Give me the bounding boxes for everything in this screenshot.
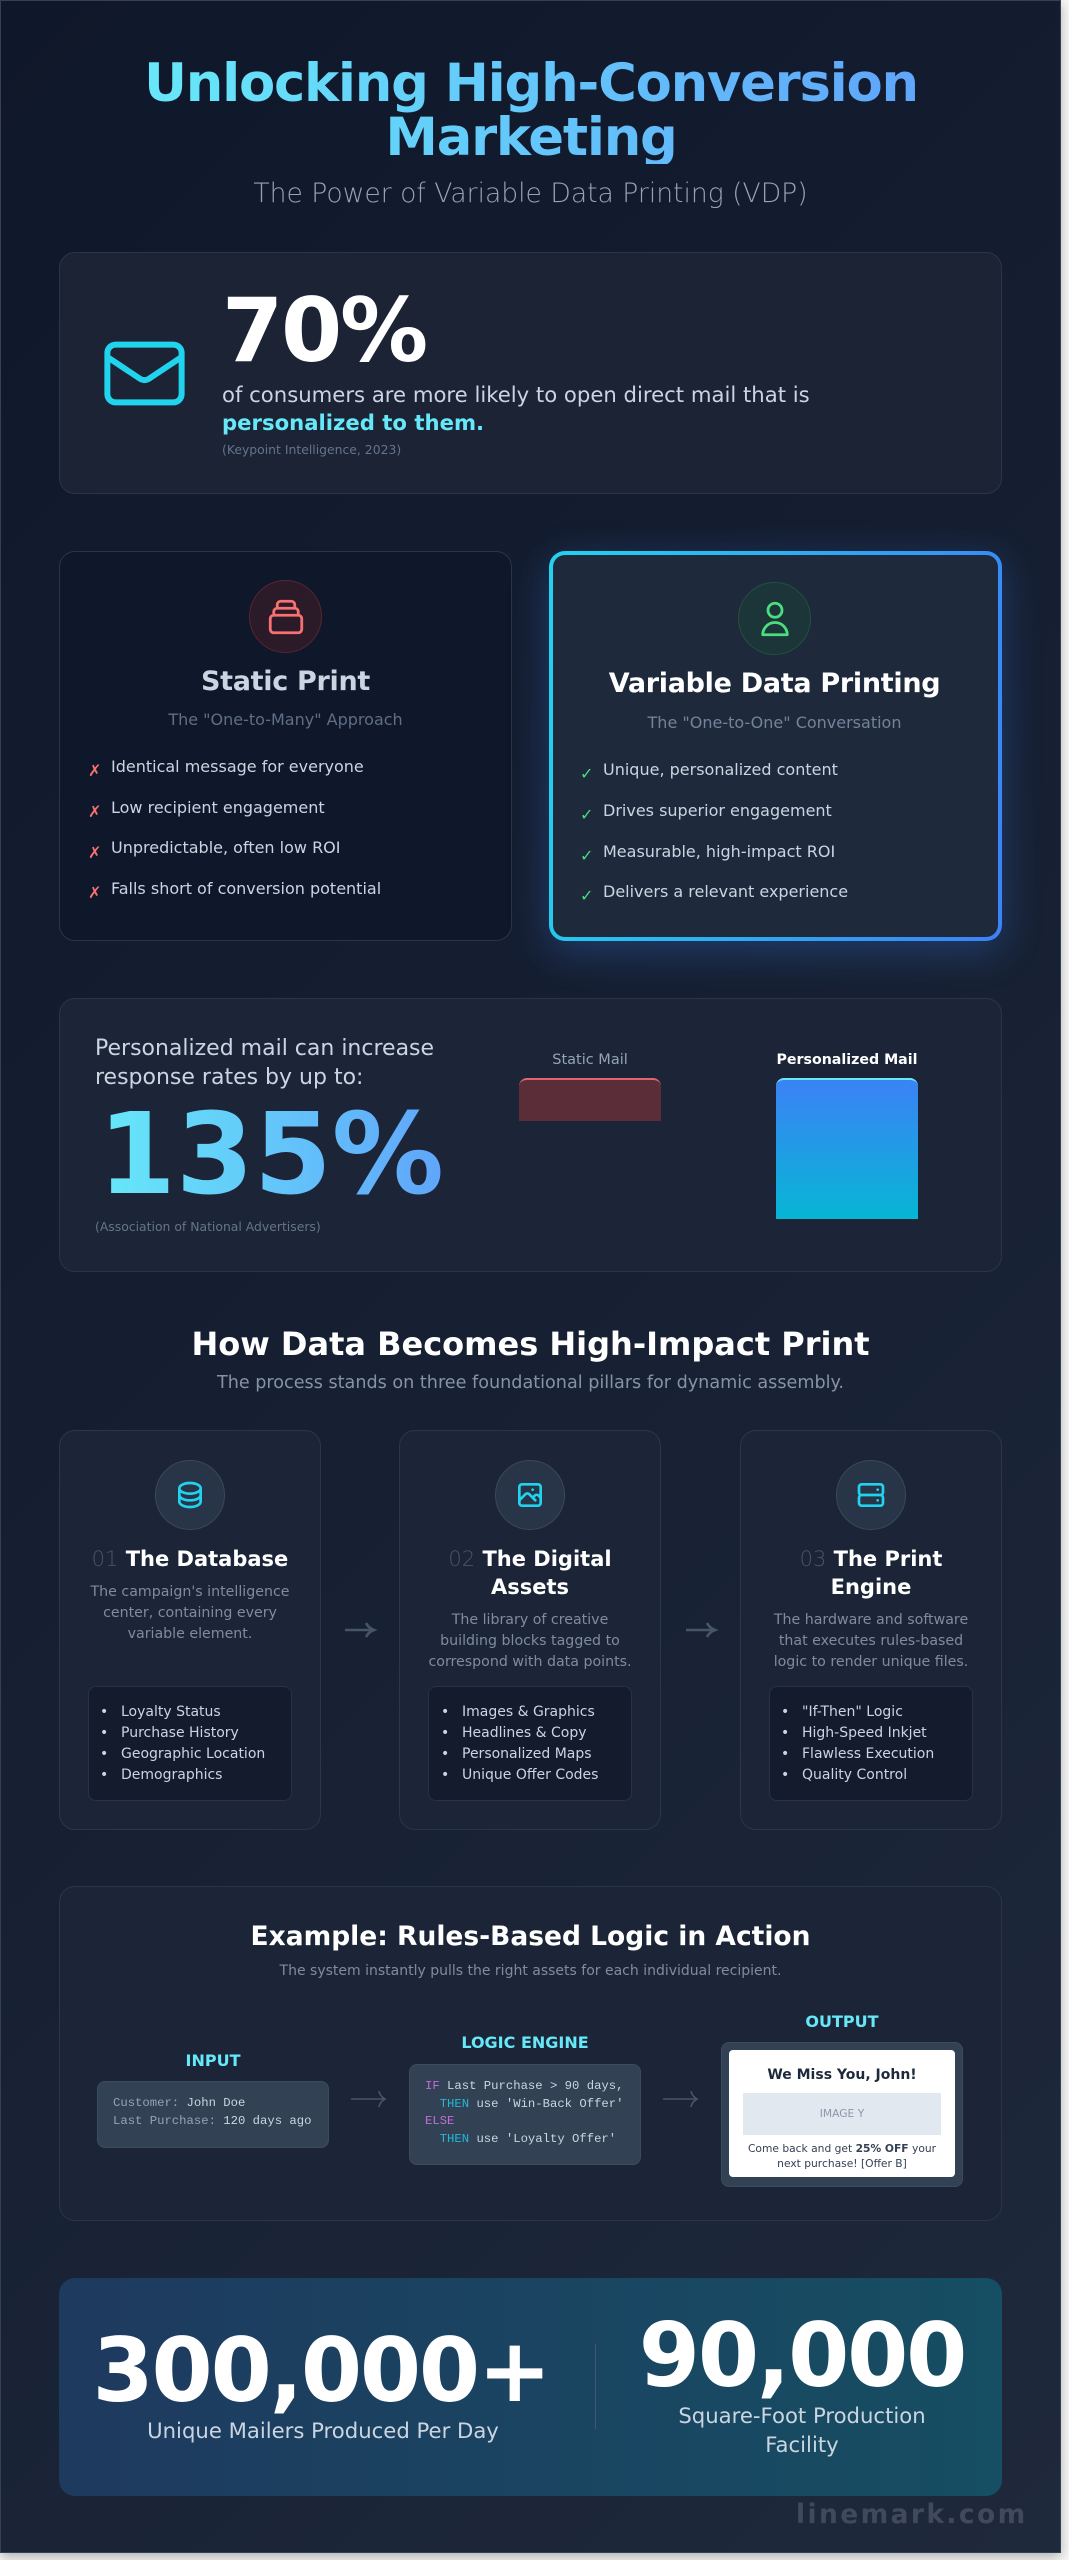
static list: Low recipient engagement: [111, 798, 325, 817]
panel: response rate: [59, 998, 1002, 1272]
list items: engine: •: [781, 1746, 789, 1762]
stat description: of consumers are more likely to open direct mail that is: [222, 382, 810, 407]
mailer headline: We Miss You, John!: [767, 2067, 917, 2083]
label: output: OUTPUT: [805, 2012, 879, 2031]
mailer offer text: Come back and get 25% OFF your: [748, 2142, 936, 2155]
input box: [97, 2081, 329, 2148]
watermark: linemark.com: [796, 2499, 1028, 2530]
list: engine features: [769, 1686, 973, 1801]
divider: [595, 2344, 596, 2429]
source note: (Keypoint Intelligence, 2023): [222, 442, 401, 457]
panel: static print: [59, 551, 512, 941]
icon: static print stack: [249, 580, 322, 653]
panel: pillar 1 database: [59, 1430, 321, 1830]
process subheading: The process stands on three foundational pillars for dynamic assembly.: [217, 1373, 844, 1393]
list items: assets: •: [441, 1767, 449, 1783]
source note: (Association of National Advertisers): [95, 1219, 321, 1234]
mailer image placeholder: IMAGE Y: [820, 2107, 864, 2120]
title: Unlocking High-Conversion: [144, 53, 918, 114]
arrow: input to logic: [351, 2091, 386, 2107]
static list: ✗: [88, 843, 101, 862]
list: database fields: [88, 1686, 292, 1801]
heading: the digital assets: [448, 1547, 612, 1599]
description: print engine: [774, 1612, 968, 1670]
list items: database: Loyalty Status: [121, 1704, 221, 1720]
stat description: personalized to them.: [222, 410, 484, 435]
list items: assets: Images & Graphics: [462, 1704, 595, 1720]
variable list: Measurable, high-impact ROI: [603, 842, 835, 861]
mailer image placeholder: [743, 2093, 941, 2135]
list items: database: [100, 1704, 265, 1783]
label: square-foot facility: Facility: [765, 2432, 839, 2456]
input box: Customer: John Doe Last Purchase: 120 days ago: [113, 2096, 312, 2128]
mailer offer text: [748, 2142, 936, 2170]
output mailer: [721, 2042, 963, 2187]
label: static mail: Static Mail: [552, 1052, 628, 1068]
variable list: ✓: [580, 846, 593, 865]
big number 70%: 70%: [222, 278, 426, 382]
label: unique mailers: Unique Mailers Produced Per Day: [147, 2418, 499, 2443]
list items: assets: •: [441, 1724, 449, 1740]
list items: database: Purchase History: [121, 1724, 239, 1740]
icon: image: [495, 1460, 565, 1530]
static list: ✗: [88, 883, 101, 902]
variable subheading: The "One-to-One" Conversation: [648, 712, 901, 732]
label: square-foot facility: Square-Foot Production: [678, 2403, 926, 2428]
stat description: [222, 382, 810, 435]
list items: engine: "If-Then" Logic: [802, 1704, 903, 1720]
panel: rules-based logic example: [59, 1886, 1002, 2221]
arrow: logic to output: [663, 2091, 698, 2107]
panel: pillar 3 print engine: [740, 1430, 1002, 1830]
label: logic engine: LOGIC ENGINE: [461, 2033, 589, 2052]
static subheading: The "One-to-Many" Approach: [168, 710, 403, 729]
arrow: pillar 2 to 3: [686, 1622, 718, 1638]
heading: the digital assets: Assets: [491, 1575, 569, 1599]
icon: envelope: [104, 342, 185, 406]
list items: engine: •: [781, 1704, 789, 1720]
subtitle: The Power of Variable Data Printing (VDP): [253, 178, 808, 209]
description: the database: [90, 1584, 289, 1642]
bar: static mail: [519, 1078, 661, 1121]
list items: assets: Headlines & Copy: [462, 1724, 586, 1740]
static list: Unpredictable, often low ROI: [111, 838, 340, 857]
list items: assets: [441, 1704, 598, 1783]
list items: database: Demographics: [121, 1767, 222, 1783]
icon: database: [154, 1460, 224, 1530]
description: digital assets: [428, 1612, 632, 1670]
stat: 300,000+: 300,000+: [93, 2318, 549, 2422]
list items: engine: High-Speed Inkjet: [802, 1724, 927, 1740]
response text: response rates by up to:: [95, 1065, 363, 1090]
variable list: Drives superior engagement: [603, 801, 832, 820]
list items: assets: Personalized Maps: [462, 1746, 592, 1762]
description: the database: variable element.: [128, 1626, 252, 1642]
label: square-foot facility: [678, 2403, 926, 2456]
stat: 90,000: 90,000: [639, 2304, 965, 2406]
static list: Falls short of conversion potential: [111, 879, 381, 898]
static list: [88, 757, 381, 902]
label: personalized mail: Personalized Mail: [776, 1052, 918, 1068]
heading: the print engine: [800, 1547, 942, 1599]
description: print engine: The hardware and software: [774, 1612, 968, 1628]
label: input: INPUT: [186, 2051, 240, 2070]
mailer card: [729, 2050, 955, 2177]
mailer offer text: next purchase! [Offer B]: [777, 2156, 907, 2170]
heading: variable data printing: Variable Data Printing: [609, 668, 940, 699]
panel: 70% stat: [59, 252, 1002, 494]
heading: the database: 01 The Database: [92, 1547, 288, 1571]
description: the database: center, containing every: [103, 1605, 277, 1621]
heading: the print engine: Engine: [831, 1575, 911, 1599]
heading: the print engine: 03 The Print: [800, 1547, 942, 1571]
variable list: [580, 760, 848, 905]
heading: static print: Static Print: [201, 666, 370, 697]
list items: database: •: [100, 1704, 108, 1720]
list items: engine: Flawless Execution: [802, 1746, 934, 1762]
logic box: [409, 2064, 641, 2165]
logic box: IF Last Purchase > 90 days, THEN use 'Win-Back Offer' ELSE THEN use 'Loyalty Offer': [425, 2079, 624, 2146]
list items: assets: •: [441, 1704, 449, 1720]
response text: [95, 1036, 434, 1090]
list items: assets: •: [441, 1746, 449, 1762]
variable list: ✓: [580, 764, 593, 783]
title: Marketing: [385, 106, 677, 168]
title: [143, 57, 919, 164]
list items: database: •: [100, 1767, 108, 1783]
variable list: ✓: [580, 886, 593, 905]
list items: engine: Quality Control: [802, 1767, 907, 1783]
panel: variable data printing: [549, 551, 1002, 941]
icon: person: [738, 582, 811, 655]
bar chart: [519, 1052, 918, 1219]
panel: production stats: [59, 2278, 1002, 2496]
description: print engine: that executes rules-based: [779, 1633, 963, 1649]
list items: engine: •: [781, 1724, 789, 1740]
static list: ✗: [88, 761, 101, 780]
bar: personalized mail: [776, 1078, 918, 1219]
big number 135%: 135%: [98, 1090, 444, 1220]
list: asset types: [428, 1686, 632, 1801]
heading: the digital assets: 02 The Digital: [448, 1547, 612, 1571]
list items: engine: [781, 1704, 934, 1783]
description: print engine: logic to render unique files.: [774, 1654, 968, 1670]
description: the database: The campaign's intelligence: [91, 1584, 289, 1600]
variable list: ✓: [580, 805, 593, 824]
icon: server: [836, 1460, 906, 1530]
description: digital assets: The library of creative: [452, 1612, 608, 1628]
response text: Personalized mail can increase: [95, 1036, 434, 1061]
static list: ✗: [88, 802, 101, 821]
list items: engine: •: [781, 1767, 789, 1783]
example subheading: The system instantly pulls the right assets for each individual recipient.: [280, 1963, 781, 1979]
arrow: pillar 1 to 2: [345, 1622, 378, 1638]
description: digital assets: building blocks tagged to: [440, 1633, 620, 1649]
variable list: Unique, personalized content: [603, 760, 838, 779]
list items: database: •: [100, 1746, 108, 1762]
list items: assets: Unique Offer Codes: [462, 1767, 598, 1783]
list items: database: •: [100, 1724, 108, 1740]
list items: database: Geographic Location: [121, 1746, 265, 1762]
panel: pillar 2 digital assets: [399, 1430, 661, 1830]
description: digital assets: correspond with data points.: [428, 1654, 632, 1670]
heading: how data becomes print: How Data Becomes High-Impact Print: [191, 1325, 870, 1363]
static list: Identical message for everyone: [111, 757, 364, 776]
variable list: Delivers a relevant experience: [603, 882, 848, 901]
example heading: Example: Rules-Based Logic in Action: [251, 1921, 810, 1952]
